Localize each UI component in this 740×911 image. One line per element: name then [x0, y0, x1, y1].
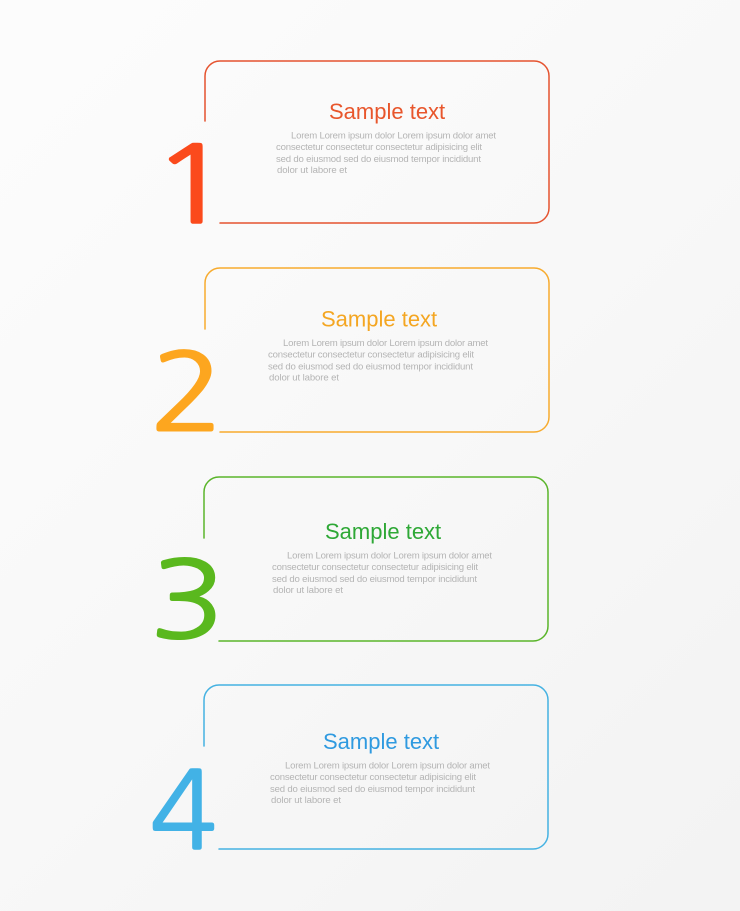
box outline 1 [205, 61, 549, 223]
body text 1: Lorem Lorem ipsum dolor Lorem ipsum dolor amet [291, 130, 496, 142]
box outline 2 [205, 268, 549, 432]
body text 3 [272, 550, 492, 596]
heading 3: Sample text [325, 519, 441, 544]
body text 2 [268, 338, 488, 384]
body text 3: consectetur consectetur consectetur adipisicing elit [272, 562, 478, 573]
body text 1: dolor ut labore et [277, 165, 347, 176]
heading 4: Sample text [323, 729, 439, 754]
panel: step 4 [150, 685, 548, 864]
body text 2: sed do eiusmod sed do eiusmod tempor incididunt [268, 362, 473, 372]
body text 4: consectetur consectetur consectetur adipisicing elit [270, 772, 476, 783]
body text 1: consectetur consectetur consectetur adipisicing elit [276, 142, 482, 153]
number 1: 1 [150, 132, 234, 238]
body text 1: sed do eiusmod sed do eiusmod tempor incididunt [276, 154, 481, 165]
body text 4: dolor ut labore et [271, 795, 341, 806]
body text 3: sed do eiusmod sed do eiusmod tempor incididunt [272, 574, 477, 585]
body text 2: dolor ut labore et [269, 372, 339, 384]
heading 1: Sample text [329, 99, 445, 124]
body text 3: dolor ut labore et [273, 585, 343, 596]
box outline 3 [204, 477, 548, 641]
number 2: 2 [150, 340, 224, 446]
body text 4 [270, 760, 490, 806]
body text 4: Lorem Lorem ipsum dolor Lorem ipsum dolor amet [285, 760, 490, 772]
panel: step 3 [150, 477, 548, 654]
panel: step 1 [150, 61, 549, 238]
heading 2: Sample text [321, 306, 437, 332]
body text 2: Lorem Lorem ipsum dolor Lorem ipsum dolor amet [283, 338, 488, 349]
panel: step 2 [150, 268, 549, 446]
body text 2: consectetur consectetur consectetur adipisicing elit [268, 350, 474, 360]
body text 4: sed do eiusmod sed do eiusmod tempor incididunt [270, 784, 475, 795]
body text 1 [276, 130, 496, 176]
number 3: 3 [150, 547, 225, 654]
body text 3: Lorem Lorem ipsum dolor Lorem ipsum dolor amet [287, 550, 492, 562]
number 4: 4 [150, 757, 217, 864]
box outline 4 [204, 685, 548, 849]
